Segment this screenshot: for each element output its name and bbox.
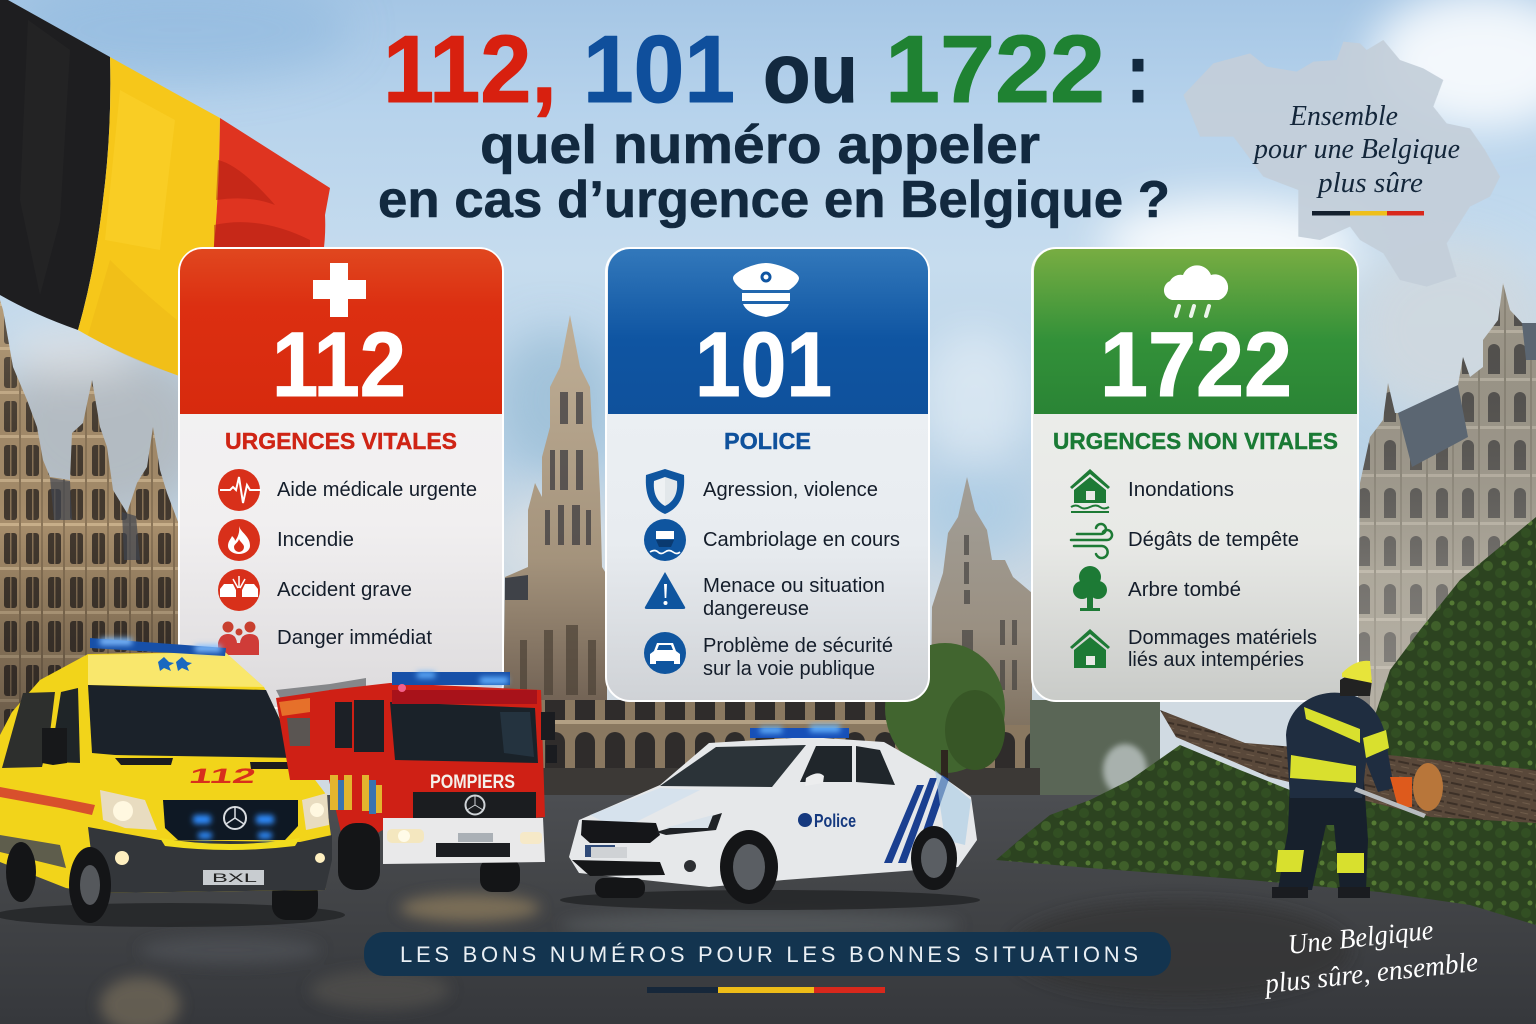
slogan: Ensemble pour une Belgique plus sûre [1252, 101, 1460, 216]
closing slogan: Une Belgique [1286, 915, 1435, 961]
item: arbre tombé [1073, 566, 1241, 611]
item: dommages matériels liés aux intempéries: liés aux intempéries [1128, 649, 1304, 671]
title: : [1126, 26, 1150, 120]
background: wet road [0, 795, 1536, 1024]
item: problème de sécurité sur la voie publique [644, 632, 893, 680]
title: en cas d’urgence en Belgique ? [378, 171, 1170, 229]
item: danger immédiat: Danger immédiat [277, 627, 432, 649]
heading: urgences non vitales: URGENCES NON VITALES [1053, 428, 1338, 454]
item: cambriolage en cours: Cambriolage en cours [703, 529, 900, 551]
header 101 [608, 249, 928, 416]
title: 1722 [885, 16, 1105, 123]
item: cambriolage en cours [644, 519, 900, 561]
tricolor bar [647, 987, 885, 993]
slogan: Ensemble pour une Belgique plus sûre: pour une Belgique [1252, 134, 1460, 165]
police car [560, 725, 980, 910]
closing slogan [1262, 915, 1480, 1000]
bottom banner: LES BONS NUMÉROS POUR LES BONNES SITUATIONS [400, 942, 1138, 967]
header 1722 [1034, 249, 1357, 416]
closing slogan: plus sûre, ensemble [1262, 947, 1480, 1000]
item: menace ou situation dangereuse [645, 572, 885, 620]
item: incendie [218, 519, 354, 561]
item: menace ou situation dangereuse: Menace ou situation [703, 575, 885, 597]
item: incendie: Incendie [277, 529, 354, 551]
panel: 112 [179, 248, 503, 708]
panel: 101 [606, 248, 929, 701]
slogan: Ensemble pour une Belgique plus sûre: plus sûre [1316, 168, 1423, 199]
fire truck POMPIERS: POMPIERS [430, 772, 515, 793]
firefighter with chainsaw [1272, 661, 1426, 898]
item: inondations: Inondations [1128, 479, 1234, 501]
fire truck POMPIERS [276, 672, 557, 892]
item: menace ou situation dangereuse: dangereuse [703, 598, 809, 620]
item: accident grave: Accident grave [277, 579, 412, 601]
panel: 1722 [1032, 248, 1358, 701]
item: aide médicale urgente [218, 469, 477, 511]
Belgian flag [0, 0, 330, 385]
title: ou [763, 26, 858, 120]
item: dommages matériels liés aux intempéries: Dommages matériels [1128, 627, 1317, 649]
item: dommages matériels liés aux intempéries [1070, 627, 1317, 671]
title: quel numéro appeler [480, 115, 1040, 175]
header 101: 101 [695, 314, 832, 416]
background: Grand-Place buildings [0, 283, 1536, 830]
item: problème de sécurité sur la voie publique: Problème de sécurité [703, 635, 893, 657]
item: inondations [1070, 469, 1234, 512]
header 1722: 1722 [1100, 314, 1292, 416]
heading: police: POLICE [724, 428, 811, 454]
slogan: Ensemble pour une Belgique plus sûre: Ensemble [1289, 101, 1398, 132]
police car: Police [814, 811, 856, 831]
item: arbre tombé: Arbre tombé [1128, 579, 1241, 601]
item: aide médicale urgente: Aide médicale urgente [277, 479, 477, 501]
bottom banner [364, 932, 1171, 976]
item: danger immédiat [218, 622, 432, 655]
title [378, 16, 1170, 229]
fallen tree and foliage [996, 517, 1536, 925]
item: dégâts de tempête [1071, 524, 1299, 558]
item: dégâts de tempête: Dégâts de tempête [1128, 529, 1299, 551]
ambulance 112: BXL [212, 871, 258, 885]
header 112: 112 [272, 314, 406, 416]
title: 101 [583, 16, 735, 123]
item: agression, violence [646, 469, 878, 514]
ambulance 112 [0, 638, 345, 927]
item: accident grave [218, 569, 412, 611]
title: 112, [383, 16, 557, 123]
item: agression, violence: Agression, violence [703, 479, 878, 501]
ambulance 112: 112 [187, 765, 258, 788]
header 112 [180, 249, 502, 416]
item: problème de sécurité sur la voie publique: sur la voie publique [703, 658, 875, 680]
heading: urgences vitales: URGENCES VITALES [225, 428, 457, 454]
background: Belgium map silhouette [1183, 40, 1500, 287]
